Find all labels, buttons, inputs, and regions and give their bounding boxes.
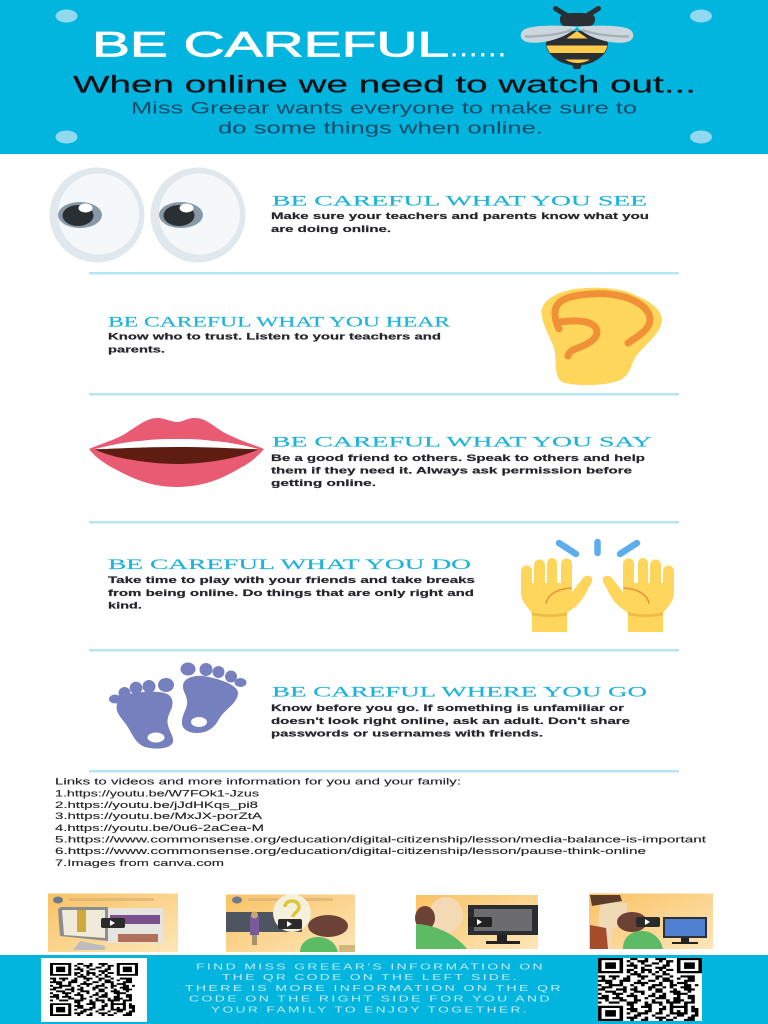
footer text: FIND MISS GREEAR'S INFORMATION ON: [196, 962, 545, 972]
text: say: them if they need it. Always ask permission before: [271, 466, 632, 476]
links list: [55, 776, 707, 868]
text: go: [271, 703, 630, 738]
video thumbnail 1: [48, 894, 178, 952]
footer banner: [0, 955, 768, 1024]
footer text: THE QR CODE ON THE LEFT SIDE.: [222, 972, 519, 982]
heading: go: BE CAREFUL WHERE YOU GO: [272, 684, 647, 700]
footer text: THERE IS MORE INFORMATION ON THE QR: [185, 983, 563, 993]
links list: 1.https://youtu.be/W7FOk1-Jzus: [55, 788, 260, 798]
text: say: getting online.: [271, 478, 376, 488]
text: see: Make sure your teachers and parents know what you: [271, 211, 649, 221]
title: ......: [451, 36, 505, 62]
text: do: Take time to play with your friends and take breaks: [108, 575, 475, 585]
links list: 2.https://youtu.be/jJdHKqs_pi8: [55, 800, 258, 810]
right QR code: [598, 958, 702, 1021]
footer text: [185, 962, 563, 1014]
title: BE CAREFUL: [92, 26, 449, 64]
video thumbnail 3: [415, 895, 538, 949]
icon: footprints: [109, 662, 246, 749]
video thumbnail 4: [589, 894, 713, 949]
footer text: CODE ON THE RIGHT SIDE FOR YOU AND: [189, 994, 552, 1004]
left QR code: [41, 958, 147, 1022]
heading: say: BE CAREFUL WHAT YOU SAY: [272, 434, 652, 450]
video thumbnail 2: [226, 894, 355, 952]
panel: hear: [108, 288, 662, 385]
icon: ear: [541, 288, 662, 385]
text: do: kind.: [108, 600, 142, 610]
panel: do: [108, 542, 674, 632]
text: hear: [108, 332, 441, 354]
links list: 7.Images from canva.com: [55, 858, 224, 868]
links list: 5.https://www.commonsense.org/education/digital-citizenship/lesson/media-balance-is-important: [55, 834, 707, 844]
panel: go: [109, 662, 647, 749]
links list: 3.https://youtu.be/MxJX-porZtA: [55, 811, 262, 821]
text: go: doesn't look right online, ask an adult. Don't share: [271, 716, 630, 726]
links list: 4.https://youtu.be/0u6-2aCea-M: [55, 823, 264, 833]
text: go: passwords or usernames with friends.: [271, 728, 543, 738]
text: do: [108, 575, 475, 610]
text: hear: Know who to trust. Listen to your teachers and: [108, 332, 441, 342]
links list: Links to videos and more information for you and your family:: [55, 776, 461, 786]
heading: do: BE CAREFUL WHAT YOU DO: [108, 557, 471, 573]
icon: raised hands: [521, 542, 674, 632]
text: see: [271, 211, 649, 234]
decorative dots: [56, 10, 712, 144]
text: see: are doing online.: [271, 224, 391, 234]
intro text: Miss Greear wants everyone to make sure to: [131, 100, 637, 118]
subtitle: When online we need to watch out...: [73, 72, 696, 98]
heading: see: BE CAREFUL WHAT YOU SEE: [272, 194, 647, 210]
header banner: [0, 0, 768, 154]
icon: bee: [521, 8, 633, 69]
text: say: [271, 453, 646, 488]
panel: say: [89, 418, 652, 488]
icon: eyes: [50, 168, 246, 262]
text: go: Know before you go. If something is unfamiliar or: [271, 703, 625, 713]
footer text: YOUR FAMILY TO ENJOY TOGETHER.: [211, 1004, 529, 1014]
heading: hear: BE CAREFUL WHAT YOU HEAR: [108, 314, 450, 330]
panel: see: [50, 168, 649, 262]
intro text: do some things when online.: [218, 120, 543, 138]
text: do: from being online. Do things that are only right and: [108, 588, 474, 598]
text: say: Be a good friend to others. Speak to others and help: [271, 453, 646, 463]
intro text: [131, 100, 637, 138]
text: hear: parents.: [108, 344, 165, 354]
links list: 6.https://www.commonsense.org/education/digital-citizenship/lesson/pause-think-online: [55, 846, 646, 856]
icon: lips: [89, 418, 264, 487]
title: [92, 26, 505, 64]
